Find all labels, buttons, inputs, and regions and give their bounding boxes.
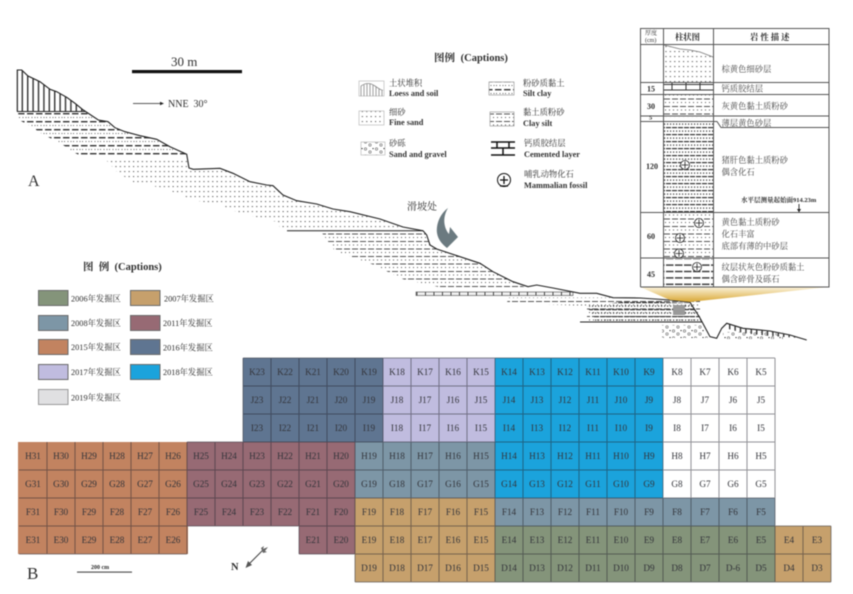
area 2018: H14	[501, 451, 517, 461]
area 2015: H29	[81, 451, 97, 461]
area 2018: G12	[557, 479, 573, 489]
area 2017: J18	[391, 395, 404, 405]
unexcavated white area: I6	[729, 423, 737, 433]
area 2016	[243, 358, 383, 442]
legend labels: 2006年发掘区	[71, 294, 121, 304]
label B: B	[27, 564, 38, 583]
unexcavated white area: J5	[757, 395, 765, 405]
sampled column block	[673, 305, 685, 315]
unexcavated white area: J6	[729, 395, 737, 405]
area 2018: J14	[503, 395, 516, 405]
legend: loess and soil	[359, 78, 439, 98]
area 2007: D4	[783, 563, 795, 573]
area 2011: H24	[221, 451, 237, 461]
legend labels: 2007年发掘区	[164, 294, 214, 304]
area 2016: K23	[249, 367, 265, 377]
area 2011: H23	[249, 451, 265, 461]
area 2017: K15	[473, 367, 489, 377]
legend: cemented layer: 钙质胶结层	[524, 138, 566, 148]
lithology descriptions: 偶含碎骨及砾石	[722, 274, 780, 284]
landslide label: 滑坡处	[407, 200, 437, 213]
lithology descriptions: 黄色黏土质粉砂	[722, 217, 780, 227]
excavation year legend	[38, 260, 214, 404]
area 2007: E18	[390, 535, 405, 545]
area 2018: H12	[557, 451, 573, 461]
legend title: 图例 (Captions)	[434, 51, 508, 64]
area 2017: J16	[447, 395, 460, 405]
area 2017	[383, 358, 495, 442]
datum note and arrow: 水平层测量起始面914.23m	[741, 195, 817, 204]
area 2006: E11	[586, 535, 601, 545]
area 2008	[355, 442, 775, 526]
area 2018: G10	[613, 479, 629, 489]
landslide curved arrow	[437, 208, 458, 248]
unexcavated white area: G6	[727, 479, 739, 489]
horizontal contact lines	[17, 112, 702, 322]
excavation grid B	[18, 358, 831, 582]
area 2006: D8	[671, 563, 683, 573]
legend: mammalian fossil: Mammalian fossil	[524, 181, 588, 190]
area 2006: D10	[613, 563, 629, 573]
area 2018: J9	[645, 395, 653, 405]
area 2011: E20	[334, 535, 349, 545]
legend labels: 2008年发掘区	[71, 318, 121, 328]
area 2006: D14	[501, 563, 517, 573]
legend: loess and soil: 土状堆积	[389, 78, 423, 88]
area 2015	[18, 442, 188, 554]
area 2007: D19	[361, 563, 377, 573]
area 2011: F22	[278, 507, 293, 517]
legend labels: 2017年发掘区	[71, 367, 121, 377]
area 2008: F8	[672, 507, 682, 517]
area 2006: D11	[585, 563, 601, 573]
rock legend	[359, 51, 588, 190]
area 2007: F15	[474, 507, 489, 517]
scale bar 30 m	[132, 54, 242, 73]
area 2006: D12	[557, 563, 573, 573]
area 2018: G13	[529, 479, 545, 489]
loess and soil layer	[17, 70, 85, 112]
area 2008: F9	[644, 507, 654, 517]
area 2006: E6	[728, 535, 739, 545]
area 2015: F31	[26, 507, 41, 517]
area 2008: F7	[700, 507, 710, 517]
unexcavated white area: I7	[701, 423, 709, 433]
label A: A	[28, 173, 40, 190]
area 2015: H27	[137, 451, 153, 461]
area 2018: I13	[531, 423, 544, 433]
thickness values: 5	[649, 114, 653, 122]
area 2017: K17	[417, 367, 433, 377]
area 2016: K20	[333, 367, 349, 377]
area 2018: K14	[501, 367, 517, 377]
area 2011: G25	[193, 479, 209, 489]
area 2006: D7	[699, 563, 711, 573]
table header	[645, 29, 790, 44]
column lithology fills	[664, 45, 713, 287]
legend: fine sand: Fine sand	[389, 118, 424, 127]
area 2011: H21	[305, 451, 321, 461]
lithology descriptions: 钙质胶结层	[722, 84, 764, 94]
datum note and arrow	[741, 195, 817, 212]
table rules	[640, 28, 829, 287]
area 2015: F29	[82, 507, 97, 517]
legend: silt clay: 粉砂质黏土	[523, 78, 564, 88]
area 2018: K11	[585, 367, 601, 377]
legend: silt clay: Silt clay	[523, 89, 552, 98]
table header: 岩 性 描 述	[750, 32, 790, 42]
area 2016: I19	[363, 423, 376, 433]
unexcavated white area: J8	[673, 395, 681, 405]
lithology descriptions	[722, 64, 804, 284]
legend labels	[71, 294, 214, 402]
unexcavated white area: I5	[757, 423, 765, 433]
unexcavated white area: H6	[727, 451, 739, 461]
area 2008: F13	[530, 507, 545, 517]
unexcavated white area: K6	[727, 367, 739, 377]
lithology descriptions: 猪肝色黏土质粉砂	[722, 155, 789, 165]
area 2015: G27	[137, 479, 153, 489]
lower clay silt bands	[507, 298, 700, 321]
area 2017: K18	[389, 367, 405, 377]
unexcavated white area: G5	[755, 479, 767, 489]
area 2018: I12	[559, 423, 572, 433]
area 2006: E5	[756, 535, 767, 545]
area 2011: G23	[249, 479, 265, 489]
area 2008: H18	[389, 451, 405, 461]
unexcavated white area: J7	[701, 395, 709, 405]
area 2008: F6	[728, 507, 738, 517]
area 2008: F5	[756, 507, 766, 517]
area 2016: J23	[251, 395, 264, 405]
area 2006: E10	[614, 535, 629, 545]
area 2008: G15	[473, 479, 489, 489]
lower dark clay silt bands	[587, 301, 702, 321]
area 2011: F24	[222, 507, 237, 517]
area 2007: D15	[473, 563, 489, 573]
area 2011: F23	[250, 507, 265, 517]
area 2011: F20	[334, 507, 349, 517]
area 2016: J21	[307, 395, 320, 405]
area 2016: J22	[279, 395, 292, 405]
area 2007: D18	[389, 563, 405, 573]
area 2007: E17	[418, 535, 433, 545]
legend labels: 2011年发掘区	[163, 318, 212, 328]
area 2006: E7	[700, 535, 711, 545]
legend labels: 2019年发掘区	[71, 392, 121, 402]
area 2018: I9	[645, 423, 653, 433]
area 2007: D17	[417, 563, 433, 573]
thickness values: 30	[647, 102, 655, 111]
thickness values: 45	[647, 270, 655, 279]
legend: sand and gravel	[361, 138, 447, 159]
area 2011: F21	[306, 507, 321, 517]
thickness values: 60	[647, 232, 655, 241]
area 2017: I18	[391, 423, 404, 433]
area 2007: E4	[784, 535, 795, 545]
legend: cemented layer	[491, 138, 580, 159]
area 2018: K13	[529, 367, 545, 377]
legend: clay silt	[490, 107, 565, 128]
legend swatches	[38, 290, 160, 404]
area 2018: K10	[613, 367, 629, 377]
area 2006: D13	[529, 563, 545, 573]
legend: mammalian fossil: 哺乳动物化石	[524, 169, 574, 179]
area 2015: H31	[25, 451, 41, 461]
area 2016: I23	[251, 423, 264, 433]
area 2011: G22	[277, 479, 293, 489]
area 2018: I14	[503, 423, 516, 433]
area 2011: F25	[194, 507, 209, 517]
area 2015: F30	[54, 507, 69, 517]
area 2018: H11	[585, 451, 601, 461]
area 2018: K12	[557, 367, 573, 377]
unexcavated white area	[663, 358, 775, 498]
area 2006: D-6	[726, 563, 741, 573]
area 2015: E26	[166, 535, 181, 545]
legend labels: 2016年发掘区	[163, 342, 213, 352]
area 2018: J10	[615, 395, 628, 405]
table header: 厚度	[645, 29, 657, 37]
legend: fine sand	[359, 107, 424, 127]
lithology descriptions: 薄层黄色砂层	[722, 118, 772, 128]
area 2008: F10	[614, 507, 629, 517]
thickness values	[646, 84, 658, 279]
gravel deposits	[662, 325, 783, 339]
table header: (cm)	[645, 37, 656, 44]
legend title: 图 例 (Captions)	[83, 260, 162, 273]
area 2007: D16	[445, 563, 461, 573]
stratigraphic column table	[640, 28, 829, 287]
area 2015: F27	[138, 507, 153, 517]
area 2008: F12	[558, 507, 573, 517]
thickness values: 120	[646, 162, 658, 171]
area 2015: H30	[53, 451, 69, 461]
area 2007: E3	[812, 535, 823, 545]
area 2016: I21	[307, 423, 320, 433]
area 2006: E12	[558, 535, 573, 545]
area 2016: I22	[279, 423, 292, 433]
area 2011	[187, 442, 355, 554]
loess cap on far slope	[725, 323, 800, 338]
area 2018: G11	[585, 479, 601, 489]
area 2006	[495, 526, 775, 582]
area 2015: G28	[109, 479, 125, 489]
area 2007	[355, 498, 831, 582]
area 2006: E14	[502, 535, 517, 545]
area 2008: G17	[417, 479, 433, 489]
legend: clay silt: Clay silt	[523, 119, 553, 128]
area 2017: I15	[475, 423, 488, 433]
scale bar 200 cm	[77, 565, 132, 573]
area 2015: F26	[166, 507, 181, 517]
area 2016: J19	[363, 395, 376, 405]
area 2007: E16	[446, 535, 461, 545]
legend: clay silt: 黏土质粉砂	[523, 107, 565, 117]
legend: fine sand: 细砂	[389, 107, 406, 117]
area 2015: E27	[138, 535, 153, 545]
lithology descriptions: 底部有薄的中砂层	[722, 241, 789, 251]
unexcavated white area: G7	[699, 479, 711, 489]
table header: 柱状图	[675, 32, 700, 42]
area 2018: I10	[615, 423, 628, 433]
area 2007: F19	[362, 507, 377, 517]
area 2018: H9	[643, 451, 655, 461]
magnifying gradient linking section to column	[640, 287, 829, 302]
area 2018	[495, 358, 663, 498]
area 2007: F17	[418, 507, 433, 517]
area 2007: D3	[811, 563, 823, 573]
fine sand wedge	[105, 159, 408, 228]
legend: sand and gravel: 砂砾	[389, 138, 406, 148]
area 2008: H15	[473, 451, 489, 461]
area 2015: E28	[110, 535, 125, 545]
area 2018: J12	[559, 395, 572, 405]
area 2018: H10	[613, 451, 629, 461]
scale bar 200 cm: 200 cm	[91, 565, 109, 571]
area 2015: E30	[54, 535, 69, 545]
lithology descriptions: 纹层状灰色粉砂质黏土	[722, 262, 804, 272]
unexcavated white area: H7	[699, 451, 711, 461]
area 2016: K22	[277, 367, 293, 377]
legend: loess and soil: Loess and soil	[389, 89, 439, 98]
fossil markers in column	[674, 160, 704, 272]
area 2011: H20	[333, 451, 349, 461]
area 2006: E13	[530, 535, 545, 545]
cemented layer band	[416, 292, 573, 296]
area 2016: I20	[335, 423, 348, 433]
area 2017: J15	[475, 395, 488, 405]
area 2011: H25	[193, 451, 209, 461]
area 2006: E8	[672, 535, 683, 545]
area 2018: G14	[501, 479, 517, 489]
lithology descriptions: 灰黄色黏土质粉砂	[722, 101, 789, 111]
area 2017: J17	[419, 395, 432, 405]
unexcavated white area: K5	[755, 367, 767, 377]
area 2015: E29	[82, 535, 97, 545]
area 2008: F11	[586, 507, 600, 517]
area 2008: G19	[361, 479, 377, 489]
area 2018: J13	[531, 395, 544, 405]
north arrow: N	[231, 562, 239, 573]
area 2017: K16	[445, 367, 461, 377]
direction arrow NNE 30	[133, 99, 208, 110]
area 2008: G18	[389, 479, 405, 489]
grid lines	[19, 358, 831, 582]
area 2016: K21	[305, 367, 321, 377]
thickness values: 15	[647, 84, 655, 94]
ground profile line	[17, 70, 807, 340]
area 2011: H22	[277, 451, 293, 461]
legend: cemented layer: Cemented layer	[524, 150, 580, 159]
unexcavated white area: H8	[671, 451, 683, 461]
area 2018: J11	[587, 395, 600, 405]
area 2015: H26	[165, 451, 181, 461]
area 2018: H13	[529, 451, 545, 461]
north arrow	[231, 546, 268, 573]
area 2008: H19	[361, 451, 377, 461]
area 2011: G20	[333, 479, 349, 489]
legend: sand and gravel: Sand and gravel	[389, 150, 447, 159]
lithology descriptions: 棕黄色细砂层	[722, 64, 772, 74]
lithology descriptions: 偶含化石	[722, 167, 755, 177]
area 2008: H16	[445, 451, 461, 461]
area 2007: E19	[362, 535, 377, 545]
area 2015: H28	[109, 451, 125, 461]
area 2017: I16	[447, 423, 460, 433]
area 2015: G29	[81, 479, 97, 489]
area 2007: E15	[474, 535, 489, 545]
silt clay wedge	[18, 112, 187, 157]
area 2008: F14	[502, 507, 517, 517]
area 2008: H17	[417, 451, 433, 461]
area 2017: I17	[419, 423, 432, 433]
legend labels: 2015年发掘区	[71, 342, 121, 352]
area 2015: G26	[165, 479, 181, 489]
area 2011: G24	[221, 479, 237, 489]
legend: mammalian fossil	[498, 169, 588, 190]
area 2018: K9	[643, 367, 655, 377]
lithology descriptions: 化石丰富	[722, 229, 755, 239]
section A: geological cross-section	[17, 54, 807, 340]
area 2006: D5	[755, 563, 767, 573]
area 2015: G30	[53, 479, 69, 489]
area 2007: F16	[446, 507, 461, 517]
area 2007: F18	[390, 507, 405, 517]
area 2015: G31	[25, 479, 41, 489]
area 2015: F28	[110, 507, 125, 517]
area 2006: E9	[644, 535, 655, 545]
unexcavated white area: I8	[673, 423, 681, 433]
area 2008: G16	[445, 479, 461, 489]
area 2018: I11	[587, 423, 599, 433]
area 2011: E21	[306, 535, 321, 545]
unexcavated white area: G8	[671, 479, 683, 489]
unexcavated white area: H5	[755, 451, 767, 461]
area 2006: D9	[643, 563, 655, 573]
area 2015: E31	[26, 535, 41, 545]
legend labels: 2018年发掘区	[163, 367, 213, 377]
area 2011: G21	[305, 479, 321, 489]
legend: silt clay	[489, 78, 564, 98]
unexcavated white area: K7	[699, 367, 711, 377]
area 2016: J20	[335, 395, 348, 405]
clay silt wedge	[322, 233, 527, 288]
direction arrow NNE 30: NNE 30°	[168, 99, 208, 110]
area 2018: G9	[643, 479, 655, 489]
scale bar 30 m: 30 m	[171, 54, 197, 69]
area 2016: K19	[361, 367, 377, 377]
unexcavated white area: K8	[671, 367, 683, 377]
